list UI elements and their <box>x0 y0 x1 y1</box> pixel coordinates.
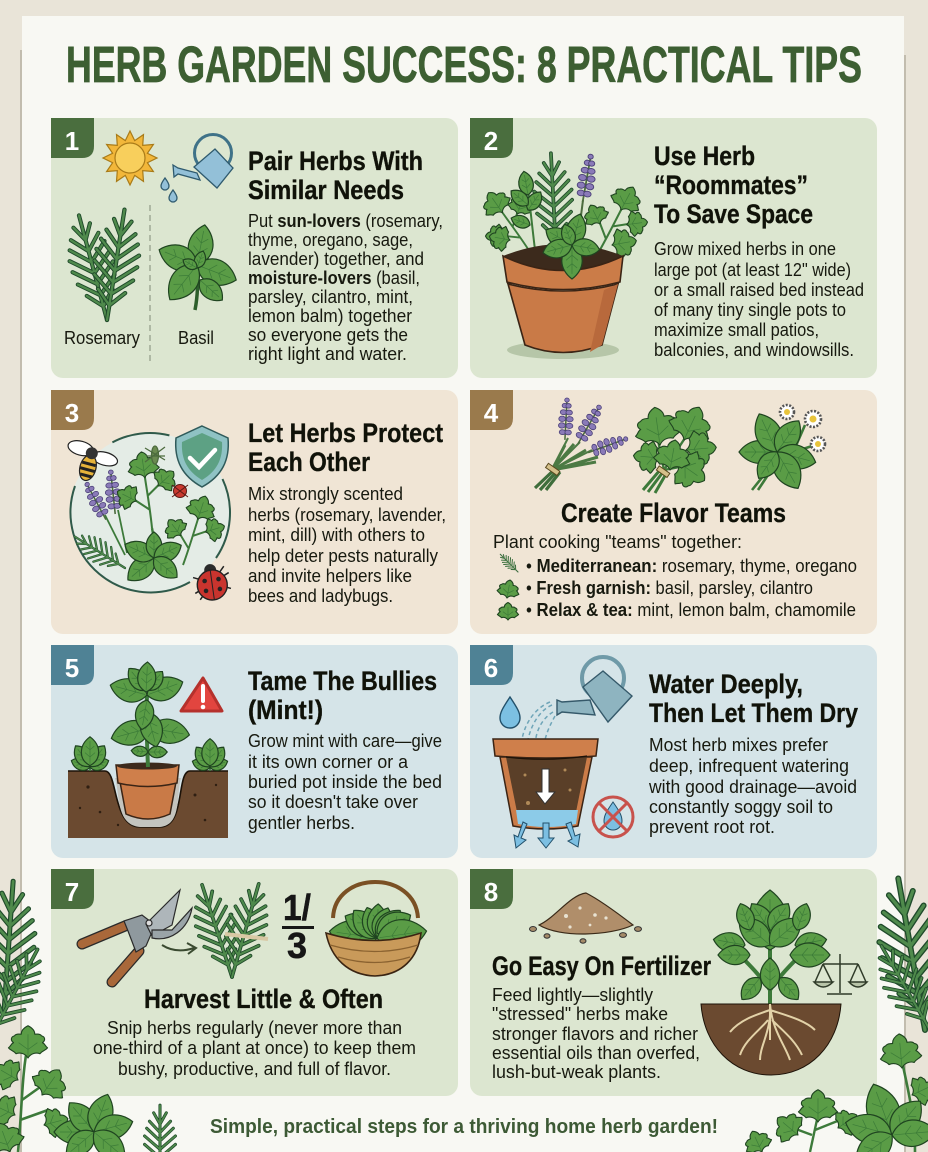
footer tagline: Simple, practical steps for a thriving home herb garden! <box>210 1116 718 1138</box>
panel 4: create flavor teams <box>470 390 877 634</box>
icon: soil with roots <box>701 1004 841 1075</box>
icon: water drop <box>500 697 520 728</box>
heading <box>248 418 443 477</box>
body text: and invite helpers like <box>248 565 412 586</box>
panel 1: pair herbs with similar needs <box>51 118 458 378</box>
body text: essential oils than overfed, <box>492 1042 700 1063</box>
body text <box>654 238 864 360</box>
number badge 5: 5 <box>65 653 79 683</box>
number badge 6 <box>470 645 513 685</box>
body text: buried pot inside the bed <box>248 771 442 792</box>
number badge 2 <box>470 118 513 158</box>
number badge 7 <box>51 869 94 909</box>
number badge 1: 1 <box>65 126 79 156</box>
icon: drain arrows <box>514 822 580 848</box>
icon: no soggy water <box>593 797 633 837</box>
body text: so everyone gets the <box>248 324 408 345</box>
number badge 4: 4 <box>484 398 499 428</box>
body text: moisture-lovers (basil, <box>248 267 420 288</box>
fraction one third <box>282 887 314 966</box>
number badge 5 <box>51 645 94 685</box>
body text: so it doesn't take over <box>248 791 418 812</box>
icon: pruning shears <box>82 890 192 982</box>
icon: bee <box>60 438 120 487</box>
heading: Tame The Bullies <box>248 666 437 696</box>
body text <box>248 210 443 364</box>
body text <box>492 984 700 1082</box>
mini icon: parsley <box>496 578 521 600</box>
label: rosemary: Rosemary <box>64 327 141 348</box>
heading: Go Easy On Fertilizer <box>492 951 711 981</box>
icon: lavender bunch <box>535 398 630 490</box>
heading: “Roommates” <box>654 170 808 200</box>
heading: Then Let Them Dry <box>649 698 858 728</box>
body text: lush-but-weak plants. <box>492 1061 661 1082</box>
number badge 8 <box>470 869 513 909</box>
body text: stronger flavors and richer <box>492 1023 698 1044</box>
body text: mint, dill) with others to <box>248 524 425 545</box>
body text <box>93 1017 416 1079</box>
panel 2: herb roommates <box>460 118 877 378</box>
number badge 4 <box>470 390 513 430</box>
number badge 2: 2 <box>484 126 498 156</box>
icon: ladybug <box>192 562 232 602</box>
bullet list: • Fresh garnish: basil, parsley, cilantro <box>526 577 813 598</box>
bullet list: • Mediterranean: rosemary, thyme, oregano <box>526 555 857 576</box>
bullet list <box>526 555 857 620</box>
intro text: Plant cooking "teams" together: <box>493 531 742 552</box>
mini icon: mint <box>497 603 519 620</box>
divider dashed <box>149 205 151 362</box>
panel 8: go easy on fertilizer <box>470 869 877 1096</box>
heading <box>248 146 423 205</box>
body text: prevent root rot. <box>649 816 775 837</box>
body text: balconies, and windowsills. <box>654 339 854 360</box>
icon: small plants <box>69 737 230 773</box>
label: basil: Basil <box>178 327 214 348</box>
body text: or a small raised bed instead <box>654 279 864 300</box>
number badge 8: 8 <box>484 877 498 907</box>
heading: Similar Needs <box>248 175 404 205</box>
icon: balance scale <box>814 954 867 994</box>
corner herbs: bottom left <box>0 879 175 1152</box>
arrow <box>162 943 196 954</box>
icon: watering can <box>557 657 632 722</box>
body text: right light and water. <box>248 343 407 364</box>
icon: red pest <box>172 484 188 498</box>
body text: gentler herbs. <box>248 812 355 833</box>
body text: deep, infrequent watering <box>649 755 849 776</box>
icon: warning triangle <box>181 678 222 711</box>
body text <box>248 730 442 833</box>
number badge 3 <box>51 390 94 430</box>
heading <box>654 141 813 229</box>
heading: Use Herb <box>654 141 755 171</box>
icon: harvest basket <box>326 882 429 976</box>
panel 5: tame the bullies <box>51 645 458 858</box>
body text: constantly soggy soil to <box>649 796 833 817</box>
icon: watering can <box>161 134 233 202</box>
heading <box>248 666 437 725</box>
body text <box>248 483 446 606</box>
icon: herb circle <box>69 433 238 593</box>
icon: parsley bunch <box>632 398 719 497</box>
body text: it its own corner or a <box>248 751 409 772</box>
number badge 1 <box>51 118 94 158</box>
icon: mixed herb pot <box>460 152 665 359</box>
icon: rosemary cut <box>184 879 277 983</box>
body text: lemon balm) together <box>248 305 412 326</box>
body text: "stressed" herbs make <box>492 1003 668 1024</box>
number badge 3: 3 <box>65 398 79 428</box>
icon: soil bed with buried pot <box>68 762 228 838</box>
icon: pot cross-section <box>493 739 598 829</box>
body text: of many tiny single pots to <box>654 299 846 320</box>
icon: water spray <box>521 702 555 750</box>
body text: maximize small patios, <box>654 319 819 340</box>
body text: Put sun-lovers (rosemary, <box>248 210 443 231</box>
mini icon: rosemary <box>497 551 521 575</box>
number badge 7: 7 <box>65 877 79 907</box>
heading: Pair Herbs With <box>248 146 423 176</box>
heading <box>649 669 858 728</box>
heading: Each Other <box>248 447 370 477</box>
fraction one third: 1/ <box>283 887 311 928</box>
icon: green insect <box>145 446 165 464</box>
body text: parsley, cilantro, mint, <box>248 286 413 307</box>
bullet list: • Relax & tea: mint, lemon balm, chamomile <box>526 599 856 620</box>
icon: shield <box>176 426 228 487</box>
icon: fertilizer pile <box>530 893 642 943</box>
heading: Let Herbs Protect <box>248 418 443 448</box>
icon: sun <box>103 131 157 185</box>
body text: thyme, oregano, sage, <box>248 229 413 250</box>
panel 6: water deeply <box>470 645 877 858</box>
heading: Harvest Little & Often <box>144 984 383 1014</box>
body text: Mix strongly scented <box>248 483 403 504</box>
body text: bushy, productive, and full of flavor. <box>118 1058 391 1079</box>
panel 7: harvest little and often <box>51 869 458 1096</box>
heading: Water Deeply, <box>649 669 803 699</box>
body text: lavender) together, and <box>248 248 424 269</box>
body text: Most herb mixes prefer <box>649 734 828 755</box>
icon: plant with leaves <box>712 890 830 1006</box>
number badge 6: 6 <box>484 653 498 683</box>
heading: (Mint!) <box>248 695 323 725</box>
body text: Snip herbs regularly (never more than <box>107 1017 402 1038</box>
icon: basil <box>155 223 241 310</box>
fraction one third: 3 <box>287 925 307 966</box>
body text: help deter pests naturally <box>248 545 439 566</box>
icon: mint plant <box>107 662 191 767</box>
heading: Create Flavor Teams <box>561 498 786 528</box>
body text: with good drainage—avoid <box>648 776 857 797</box>
body text: herbs (rosemary, lavender, <box>248 504 446 525</box>
corner herbs: bottom right <box>740 873 928 1152</box>
body text: bees and ladybugs. <box>248 585 393 606</box>
body text <box>648 734 857 837</box>
icon: tea bunch <box>739 405 825 495</box>
heading: To Save Space <box>654 199 813 229</box>
icon: rosemary <box>59 206 146 325</box>
panel 3: let herbs protect <box>51 390 458 634</box>
body text: Grow mixed herbs in one <box>654 238 836 259</box>
body text: Grow mint with care—give <box>248 730 442 751</box>
body text: Feed lightly—slightly <box>492 984 654 1005</box>
body text: large pot (at least 12" wide) <box>654 259 851 280</box>
body text: one-third of a plant at once) to keep them <box>93 1037 416 1058</box>
